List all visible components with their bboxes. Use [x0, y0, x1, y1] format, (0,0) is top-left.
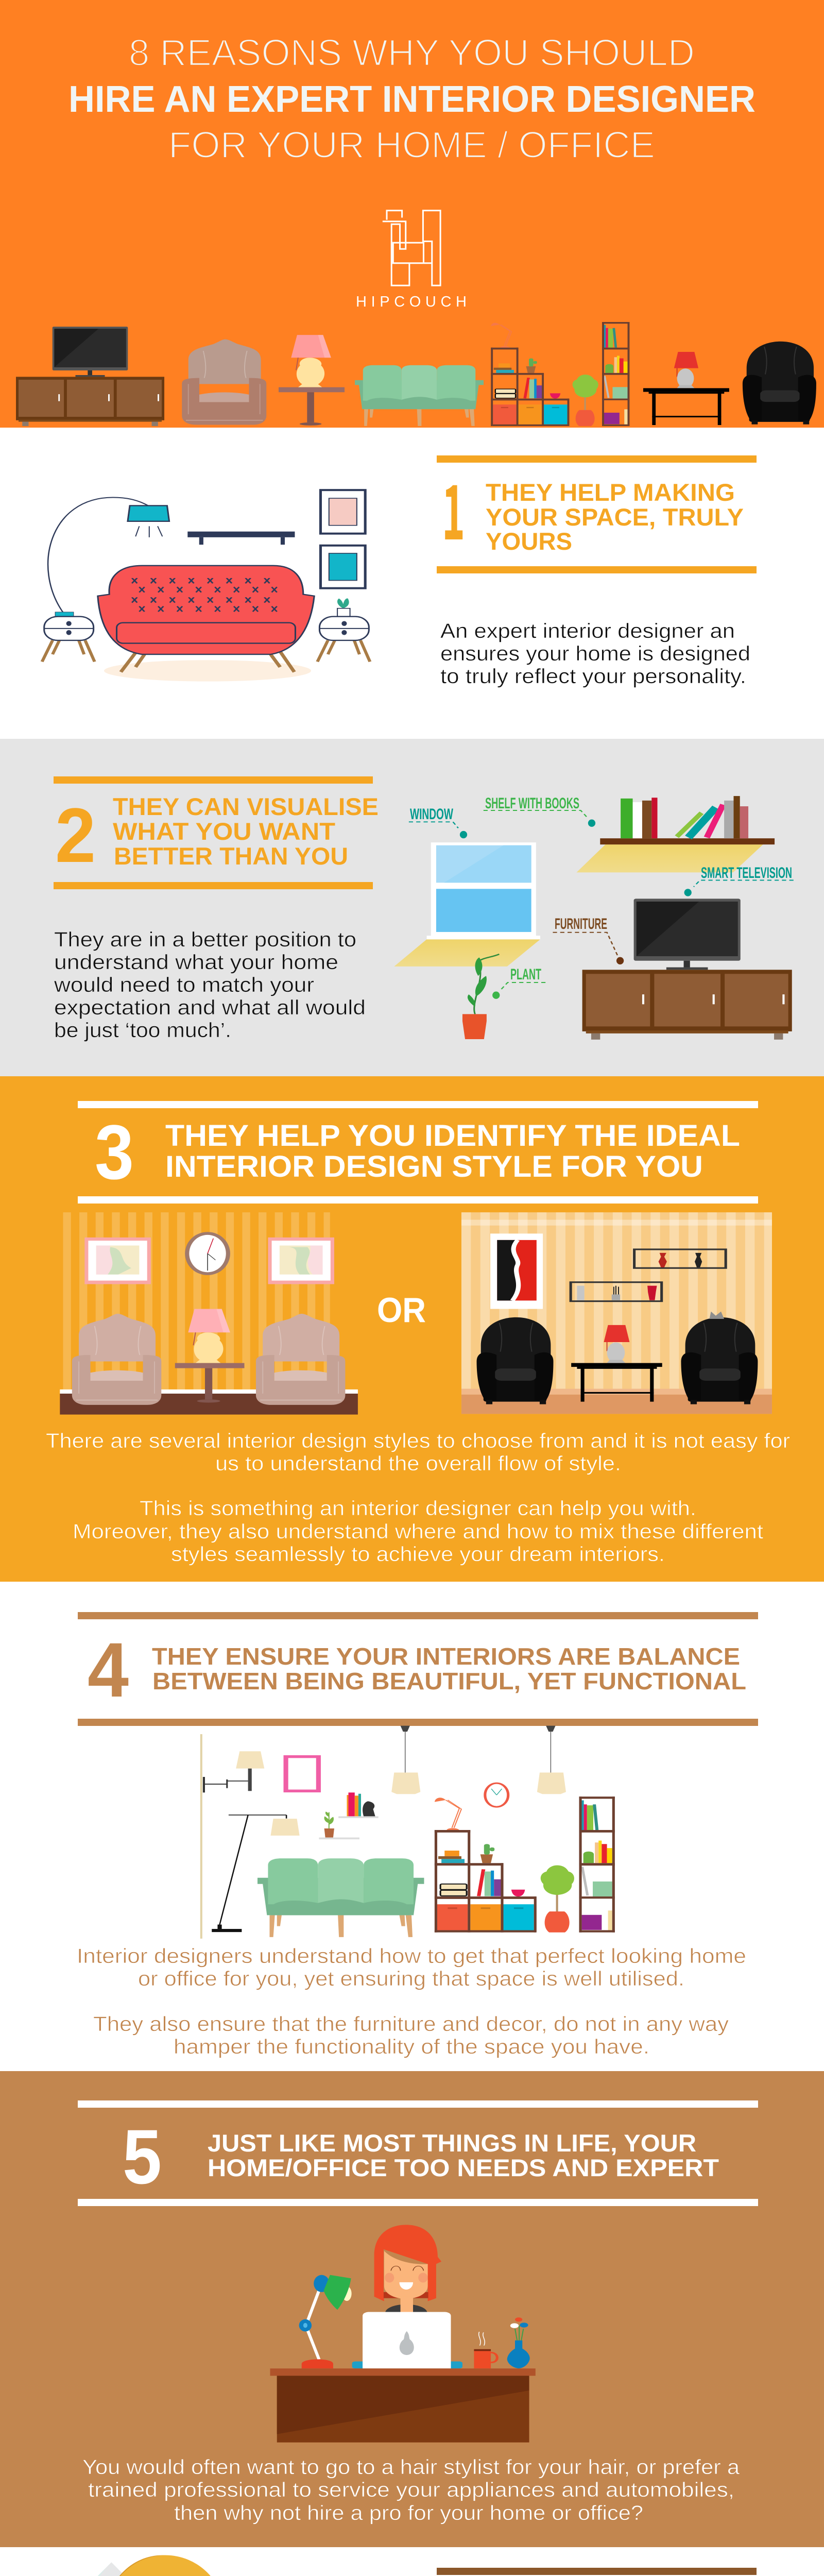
panel: reason 6	[0, 2547, 824, 2576]
body text: reason 2: expectation and what all would	[54, 996, 366, 1019]
body text: reason 1: to truly reflect your personality.	[440, 665, 746, 688]
heading: reason 5: 5	[123, 2113, 162, 2200]
heading: reason 5: HOME/OFFICE TOO NEEDS AND EXPERT	[208, 2154, 719, 2181]
heading: reason 1: THEY HELP MAKING	[486, 479, 735, 506]
panel: reason 5	[0, 2071, 824, 2547]
illustration: labelled room elements	[394, 795, 794, 1040]
illustration: functional living room	[200, 1726, 615, 1939]
furniture: tv on cabinet	[16, 327, 164, 426]
furniture: black table with lamp	[643, 352, 729, 425]
illustration: classic room	[60, 1212, 358, 1415]
body text: reason 3: us to understand the overall flow of style.	[215, 1452, 621, 1475]
body text: reason 1: ensures your home is designed	[440, 642, 750, 665]
heading: reason 2: BETTER THAN YOU	[114, 842, 348, 870]
heading: reason 2	[54, 776, 379, 889]
heading: reason 4: BETWEEN BEING BEAUTIFUL, YET FUNCTIONAL	[152, 1668, 746, 1694]
title: 8 REASONS WHY YOU SHOULD	[129, 32, 695, 74]
panel: reason 2	[0, 739, 824, 1076]
heading: reason 2: WHAT YOU WANT	[113, 818, 335, 845]
heading: reason 2: 2	[55, 792, 96, 878]
body text: reason 4: or office for you, yet ensuring that space is well utilised.	[138, 1968, 684, 1990]
body text: reason 5: then why not hire a pro for your home or office?	[174, 2502, 643, 2524]
heading: reason 2: THEY CAN VISUALISE	[113, 793, 379, 820]
panel: reason 4	[0, 1582, 824, 2071]
body text: reason 2: understand what your home	[54, 951, 338, 974]
heading: reason 4: 4	[88, 1626, 129, 1713]
panel: reason 1	[0, 428, 824, 739]
illustration: designer at desk	[270, 2225, 536, 2443]
illustration: labelled room elements: SHELF WITH BOOKS	[485, 795, 579, 812]
body text: reason 2: They are in a better position to	[54, 928, 356, 951]
furniture: shelves	[491, 322, 629, 426]
heading: reason 5: JUST LIKE MOST THINGS IN LIFE, YOUR	[208, 2129, 696, 2157]
body text: reason 3	[46, 1430, 790, 1566]
illustration: modern room	[461, 1212, 772, 1414]
body text: reason 3: styles seamlessly to achieve your dream interiors.	[171, 1543, 665, 1566]
illustration: hand with coin and watch	[0, 2555, 304, 2576]
furniture: green sofa	[355, 365, 484, 426]
heading: reason 1	[437, 453, 757, 573]
heading: reason 4	[78, 1612, 758, 1726]
heading: reason 3: 3	[95, 1109, 134, 1195]
heading: reason 5	[78, 2100, 758, 2206]
furniture: armchair	[182, 340, 266, 425]
body text: reason 4: They also ensure that the furniture and decor, do not in any way	[93, 2013, 729, 2036]
body text: reason 1	[440, 620, 750, 688]
title: HIRE AN EXPERT INTERIOR DESIGNER	[68, 79, 756, 120]
body text: reason 4	[77, 1945, 746, 2058]
illustration: labelled room elements: WINDOW	[410, 806, 453, 823]
body text: reason 5	[82, 2456, 740, 2524]
illustration: labelled room elements: PLANT	[510, 966, 541, 983]
panel: header	[0, 0, 824, 428]
title	[68, 32, 756, 166]
body text: reason 3: There are several interior design styles to choose from and it is not easy for	[46, 1430, 790, 1452]
furniture: black armchair	[743, 342, 816, 425]
logo: Hipcouch: HIPCOUCH	[356, 294, 467, 310]
body text: reason 5: You would often want to go to a hair stylist for your hair, or prefer a	[82, 2456, 740, 2479]
heading: reason 1: YOUR SPACE, TRULY	[486, 503, 744, 531]
title: FOR YOUR HOME / OFFICE	[168, 125, 655, 166]
heading: reason 6	[437, 2568, 757, 2576]
body text: reason 4: hamper the functionality of the space you have.	[174, 2036, 649, 2058]
logo: Hipcouch	[356, 211, 467, 310]
body text: reason 2	[54, 928, 366, 1042]
body text: reason 3: This is something an interior designer can help you with.	[140, 1497, 696, 1520]
illustration: labelled room elements: FURNITURE	[555, 916, 607, 933]
heading: reason 1: 1	[442, 453, 465, 562]
heading: reason 3	[78, 1101, 758, 1204]
body text: reason 2: would need to match your	[54, 974, 314, 996]
heading: reason 4: THEY ENSURE YOUR INTERIORS ARE BALANCE	[152, 1643, 740, 1670]
panel: reason 3	[0, 1076, 824, 1582]
heading: reason 1: YOURS	[486, 528, 572, 555]
illustration: red sofa room	[42, 490, 370, 682]
heading: reason 3: THEY HELP YOU IDENTIFY THE IDEAL	[165, 1119, 740, 1153]
body text: reason 1: An expert interior designer an	[440, 620, 735, 642]
body text: reason 3: Moreover, they also understand where and how to mix these different	[73, 1520, 763, 1543]
body text: reason 2: be just ‘too much’.	[54, 1019, 231, 1042]
heading: reason 3: INTERIOR DESIGN STYLE FOR YOU	[165, 1150, 703, 1183]
body text: reason 4: Interior designers understand how to get that perfect looking home	[77, 1945, 746, 1968]
body text: reason 5: trained professional to service your appliances and automobiles,	[88, 2479, 734, 2501]
label: or: OR	[377, 1291, 426, 1330]
furniture: table lamp	[279, 335, 345, 426]
